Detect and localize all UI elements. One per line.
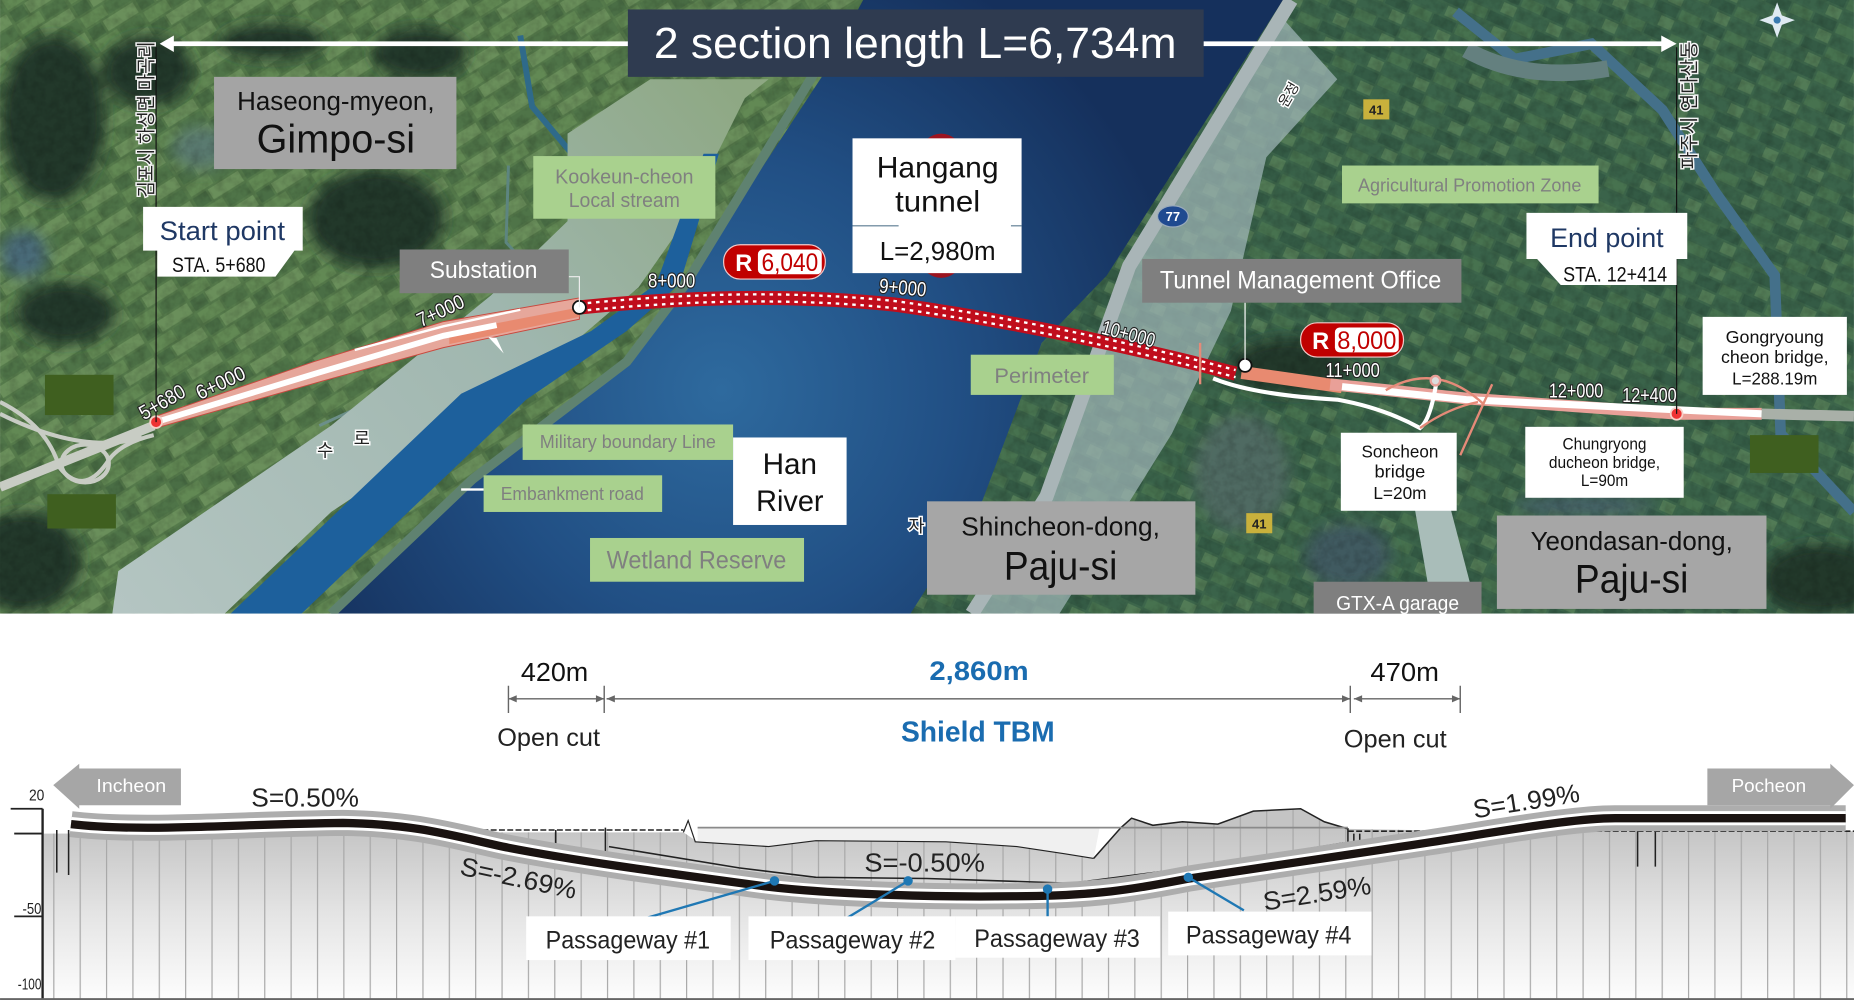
label: Gimpo-si: Haseong-myeon, [237,86,435,116]
map place marks: 수 [317,440,333,460]
label: Kookeun-cheon local stream: Kookeun-cheon [555,166,693,188]
label: Chungryong ducheon bridge: L=90m [1581,471,1628,490]
road shields: 41 [1252,517,1266,532]
farmland canals [319,35,570,426]
label: passageway 1 [526,916,731,960]
slope labels: S=0.50% [251,782,359,812]
label: Gimpo-si: Gimpo-si [257,117,415,162]
station chainage labels: 10+000 [1099,317,1157,352]
label: Gongryoung cheon bridge: cheon bridge, [1721,347,1829,367]
label: Shincheon-dong Paju-si: Shincheon-dong, [961,512,1160,542]
label: Han River: Han [763,448,817,481]
radius badge R 6,040: 6,040 [761,250,818,277]
river levee [331,47,830,614]
icon: compass [1759,2,1795,38]
label: Yeondasan-dong Paju-si: Yeondasan-dong, [1531,526,1733,556]
station chainage labels: 5+680 [136,381,190,425]
label: Yeondasan-dong Paju-si [1497,516,1766,609]
radius badge R 8,000: R [1312,329,1329,355]
label: perimeter: Perimeter [994,364,1089,388]
radius badge R 8,000 [1301,323,1403,357]
dimension: 470m open cut [1344,657,1460,753]
section length arrow [160,35,1677,52]
radius badge R 6,040 [724,245,825,279]
road shields [1158,99,1389,533]
label: Gongryoung cheon bridge: Gongryoung [1726,327,1824,347]
hidden radius badge behind tunnel label [903,134,979,278]
label: passageway 4: Passageway #4 [1186,923,1352,950]
label: Soncheon bridge: L=20m [1373,483,1427,503]
label: start point: Start point [160,215,285,246]
label: tunnel management office [1142,259,1461,303]
radius badge R 8,000: 8,000 [1337,328,1396,355]
map place marks [317,80,1303,536]
axis labels: -100 [18,977,41,994]
dimension: 2,860m shield TBM: Shield TBM [901,716,1055,748]
station chainage labels: 7+000 [414,291,468,332]
station chainage labels: 12+000 [1549,380,1603,402]
road east of tunnel [1200,343,1854,455]
right bank translucent zone [975,12,1337,614]
label: wetland reserve [590,538,804,582]
label: GTX-A garage [1314,582,1482,615]
map place marks: 운정 [1276,80,1303,110]
label: Gongryoung cheon bridge: L=288.19m [1732,368,1817,388]
land: left fields [0,0,899,614]
dimension: 470m open cut: 470m [1370,657,1439,687]
passageway leader lines [648,874,1244,918]
axis labels: -50 [22,901,41,918]
Kookeun-cheon local stream [231,154,719,614]
Korean boundary labels [136,41,1701,197]
label: embankment road: Embankment road [501,483,644,504]
radius badge R 6,040: R [735,251,752,277]
masked map patches [45,375,1819,529]
label: Chungryong ducheon bridge: Chungryong [1563,434,1646,453]
label: Gongryoung cheon bridge [1703,317,1847,395]
station chainage labels: 12+400 [1622,385,1677,407]
label: Hangang tunnel [853,138,1022,273]
label: substation: Substation [430,258,537,284]
slope labels [251,778,1582,917]
label: Yeondasan-dong Paju-si: Paju-si [1575,556,1688,601]
road shields: 77 [1166,209,1180,224]
tunnel alignment [579,294,1236,377]
road west of tunnel [156,298,579,428]
slope labels: S=-0.50% [864,847,985,877]
label: Hangang tunnel: tunnel [895,186,980,219]
label: Soncheon bridge [1341,433,1457,511]
arrow: Pocheon: Pocheon [1732,776,1806,797]
slope labels: S=-2.69% [458,851,580,905]
label: military boundary line: Military boundary Line [540,431,716,452]
dimension: 420m open cut: Open cut [497,725,600,752]
label: start point: STA. 5+680 [172,253,265,277]
label: Chungryong ducheon bridge [1525,427,1684,498]
arrow: Incheon [53,764,181,809]
river water section [698,828,1100,858]
land: right fields [899,0,1854,614]
terrain and water level lines [57,809,1854,883]
label: Han River [733,437,847,525]
station chainage labels: 11+000 [1325,360,1380,382]
start, end and structure markers [150,301,1683,428]
label: passageway 1: Passageway #1 [546,927,710,954]
map noise texture [0,0,1854,614]
label: Kookeun-cheon local stream: Local stream [569,190,680,212]
label: substation [400,249,569,293]
label: embankment road [461,475,662,512]
label: Shincheon-dong Paju-si: Paju-si [1004,543,1117,588]
label: Chungryong ducheon bridge: ducheon bridge, [1549,453,1660,472]
station chainage labels: 9+000 [878,275,927,301]
label: passageway 4 [1168,912,1372,955]
aerial map panel [0,0,1854,615]
Han River [331,0,1283,614]
label: Kookeun-cheon local stream [533,156,715,219]
Korean boundary labels: 파주시 연다산동 [1679,41,1701,169]
station chainage labels [136,270,1677,425]
vertical axis and ticks [0,809,1854,999]
arrow: Pocheon [1707,764,1854,809]
light wetland zone [112,79,769,614]
Gongneung stream meander [1456,12,1854,512]
forest and village patches [0,24,1854,615]
label: end point [1526,213,1687,286]
axis labels: 20 [29,787,44,804]
label: end point: End point [1550,222,1664,253]
label: Hangang tunnel: Hangang [877,151,999,184]
title: section length: 2 section length L=6,734m [654,19,1176,68]
leader lines [156,47,1677,422]
title: section length [628,9,1204,77]
label: passageway 3: Passageway #3 [974,926,1140,953]
road shields: 41 [1369,103,1384,118]
station chainage labels: 8+000 [648,270,695,292]
riverside road [972,0,1291,614]
label: tunnel management office: Tunnel Management Office [1160,267,1441,294]
label: Gimpo-si [214,77,456,169]
dimension: 2,860m shield TBM: 2,860m [929,655,1029,686]
map place marks: 로 [354,429,370,449]
interchange at start [0,402,154,487]
label: wetland reserve: Wetland Reserve [607,548,786,575]
label: passageway 2: Passageway #2 [770,927,935,954]
label: agricultural promotion zone [1342,166,1599,203]
label: agricultural promotion zone: Agricultural Promotion Zone [1358,175,1581,196]
tunnel band [71,818,1846,896]
label: military boundary line [523,424,733,460]
label: passageway 2 [748,916,955,960]
label: passageway 3 [955,916,1160,958]
map place marks: 자 [908,516,925,536]
dimension: 420m open cut: 420m [521,657,588,687]
label: Soncheon bridge: bridge [1375,462,1426,482]
label: GTX-A garage: GTX-A garage [1336,593,1459,615]
label: start point [143,207,303,277]
label: Han River: River [756,485,824,518]
label: end point: STA. 12+414 [1563,262,1667,286]
label: Shincheon-dong Paju-si [927,501,1195,595]
station chainage labels: 6+000 [193,363,249,405]
ground body [44,810,1854,998]
label: Soncheon bridge: Soncheon [1362,442,1438,462]
slope labels: S=2.59% [1261,870,1373,917]
slope labels: S=1.99% [1471,778,1582,824]
arrow: Incheon: Incheon [96,776,166,797]
label: Hangang tunnel: L=2,980m [880,236,996,266]
GTX-A strip [1415,510,1470,582]
dimension: 420m open cut [497,657,604,752]
longitudinal profile chart [0,790,1854,1000]
dimension: 2,860m shield TBM [607,655,1350,748]
label: perimeter [971,355,1114,395]
Korean boundary labels: 김포시 하성면 마곡리 [136,41,158,197]
dimension: 470m open cut: Open cut [1344,726,1447,753]
axis labels [18,787,44,994]
